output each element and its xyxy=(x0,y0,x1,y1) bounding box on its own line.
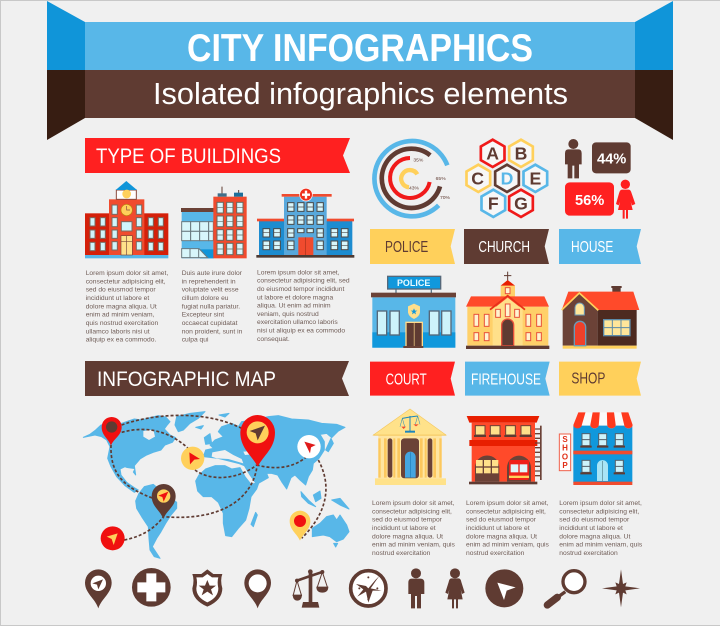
icon: scales of justice xyxy=(293,569,328,608)
hexagon letters: A xyxy=(486,144,499,164)
text block: shop: nostrud exercitation xyxy=(559,550,618,557)
text block: firehouse xyxy=(466,500,550,557)
building: police station: POLICE xyxy=(397,278,430,288)
text block: firehouse: consectetur adipisicing elit, xyxy=(466,508,546,515)
icon: medical cross xyxy=(132,568,171,607)
ring chart: 35% xyxy=(413,158,424,164)
56 percent box: 56% xyxy=(575,193,604,209)
text block: town hall: aliquip ex ea commodo. xyxy=(86,337,156,344)
text block: office: voluptate velit esse xyxy=(182,287,239,294)
ribbon: shop xyxy=(559,362,641,396)
icon: magnifier xyxy=(547,571,585,605)
text block: town hall: sed do eiusmod tempor xyxy=(86,287,156,294)
text block: office: Duis aute irure dolor xyxy=(182,270,243,277)
ribbon: court xyxy=(370,362,455,396)
text block: court xyxy=(372,500,456,557)
text block: hospital xyxy=(257,269,350,343)
hexagon letters: F xyxy=(488,194,499,214)
icon: man xyxy=(408,568,424,608)
building: town hall xyxy=(85,181,168,258)
icon: four-point star xyxy=(602,569,640,607)
ring chart: 70% xyxy=(440,195,451,201)
text block: shop: dolore magna aliqua. Ut xyxy=(559,533,630,540)
text block: firehouse: incididunt ut labore et xyxy=(466,525,530,532)
hexagon letters: D xyxy=(501,169,514,189)
text block: town hall: Lorem ipsum dolor sit amet, xyxy=(86,270,168,277)
text block: hospital: ut labore et dolore magna xyxy=(257,294,333,301)
building: firehouse xyxy=(467,416,542,484)
ribbon: infographic map xyxy=(85,361,349,396)
text block: office: non proident, sunt in xyxy=(182,328,243,335)
ring chart: 43% xyxy=(409,185,420,191)
text block: firehouse: dolore magna aliqua. Ut xyxy=(466,533,537,540)
text block: town hall: consectetur adipisicing elit, xyxy=(86,278,166,285)
text block: firehouse: enim ad minim veniam, quis xyxy=(466,542,550,549)
icon: woman xyxy=(616,180,635,219)
text block: court: dolore magna aliqua. Ut xyxy=(372,533,443,540)
text block: hospital: consequat. xyxy=(257,336,290,343)
marker: red circle xyxy=(101,526,125,550)
continents xyxy=(83,412,349,558)
text block: hospital: exercitation ullamco laboris xyxy=(257,319,338,326)
ring chart xyxy=(374,141,451,216)
hexagon letters: C xyxy=(471,169,484,189)
pin: yellow xyxy=(290,511,310,541)
text block: firehouse: Lorem ipsum dolor sit amet, xyxy=(466,500,549,507)
marker: yellow circle xyxy=(181,447,204,470)
ribbon: shop: SHOP xyxy=(571,371,605,388)
text block: office: occaecat cupidatat xyxy=(182,320,238,327)
building: shop: O xyxy=(562,452,568,461)
ribbon: police xyxy=(370,229,455,264)
building: court xyxy=(373,409,446,485)
text block: hospital: aliqua. Ut enim ad minim xyxy=(257,303,331,310)
text block: shop: incididunt ut labore et xyxy=(559,525,623,532)
pin: large red xyxy=(240,415,275,467)
ribbon: type of buildings: TYPE OF BUILDINGS xyxy=(96,145,281,168)
text block: town hall: enim ad minim veniam, xyxy=(86,312,155,319)
text block: town hall xyxy=(86,270,168,344)
text block: hospital: veniam, quis nostrud xyxy=(257,311,319,318)
pin: brown xyxy=(152,484,176,519)
icon: pin with arrow xyxy=(85,569,112,608)
building: office xyxy=(181,187,247,258)
ring chart: 65% xyxy=(436,176,446,182)
text block: shop: sed do eiusmod tempor xyxy=(559,517,630,524)
building: shop: H xyxy=(562,444,568,453)
text block: town hall: incididunt ut labore et xyxy=(86,295,149,302)
building: shop xyxy=(559,412,633,485)
text block: shop: Lorem ipsum dolor sit amet, xyxy=(559,500,642,507)
marker: white circle xyxy=(297,435,321,458)
pin: red small xyxy=(102,417,122,446)
text block: court: incididunt ut labore et xyxy=(372,525,436,532)
text block: office: in reprehenderit in xyxy=(182,278,236,285)
icon: map pin xyxy=(244,569,271,608)
building: shop: P xyxy=(562,461,568,470)
text block: hospital: do eiusmod tempor incididunt xyxy=(257,286,345,293)
icon: man xyxy=(565,139,582,178)
text block: hospital: Lorem ipsum dolor sit amet, xyxy=(257,269,340,276)
ribbon: church: CHURCH xyxy=(478,239,530,256)
icon: police badge xyxy=(192,569,222,607)
text block: town hall: ullamco laboris nisi ut xyxy=(86,328,150,335)
text block: shop: consectetur adipisicing elit, xyxy=(559,508,639,515)
hexagon letters: E xyxy=(529,169,541,189)
icon: navigation arrow xyxy=(485,569,523,607)
text block: court: Lorem ipsum dolor sit amet, xyxy=(372,500,455,507)
ribbon: church xyxy=(464,229,549,264)
building: hospital xyxy=(256,188,354,258)
text block: office: Excepteur sint xyxy=(182,312,224,319)
hexagon letters xyxy=(466,140,547,217)
hexagon letters: B xyxy=(515,144,527,164)
text block: court: sed do eiusmod tempor xyxy=(372,517,443,524)
building: house xyxy=(562,286,639,349)
44 percent box: 44% xyxy=(597,151,626,167)
text block: shop: enim ad minim veniam, quis xyxy=(559,542,643,549)
ribbon: type of buildings xyxy=(85,138,350,173)
text block: court: nostrud exercitation xyxy=(372,550,431,557)
text block: court: consectetur adipisicing elit, xyxy=(372,508,452,515)
ribbon: house xyxy=(559,229,641,264)
text block: town hall: quis nostrud exercitation xyxy=(86,320,158,327)
gender statistics xyxy=(565,139,635,219)
subtitle: Isolated infographics elements xyxy=(153,76,568,111)
icon: compass xyxy=(351,571,386,606)
dashed routes xyxy=(111,415,326,540)
text block: firehouse: nostrud exercitation xyxy=(466,550,525,557)
text block: shop xyxy=(559,500,643,557)
text block: hospital: consectetur adipisicing elit, sed xyxy=(257,278,350,285)
ribbon: court: COURT xyxy=(386,371,427,388)
ribbon: police: POLICE xyxy=(385,239,428,256)
icon: woman xyxy=(445,568,465,608)
text block: court: enim ad minim veniam, quis xyxy=(372,542,456,549)
ribbon: house: HOUSE xyxy=(571,239,613,256)
text block: office: fugiat nulla pariatur. xyxy=(182,303,240,310)
hexagon letters: G xyxy=(514,194,528,214)
text block: office: culpa qui xyxy=(182,337,209,344)
text block: town hall: dolore magna aliqua. Ut xyxy=(86,303,157,310)
world map xyxy=(83,412,349,558)
text block: office: cillum dolore eu xyxy=(182,295,229,302)
text block: office xyxy=(182,270,243,344)
building: shop: S xyxy=(562,435,568,444)
header banner xyxy=(47,1,673,140)
ribbon: infographic map: INFOGRAPHIC MAP xyxy=(97,368,276,391)
text block: hospital: nisi ut aliquip ex ea commodo xyxy=(257,328,345,334)
building: police station xyxy=(371,276,456,348)
ribbon: firehouse xyxy=(465,362,550,396)
text block: firehouse: sed do eiusmod tempor xyxy=(466,517,537,524)
building: church xyxy=(466,272,549,349)
ribbon: firehouse: FIREHOUSE xyxy=(471,371,541,388)
title: CITY INFOGRAPHICS xyxy=(187,27,533,70)
